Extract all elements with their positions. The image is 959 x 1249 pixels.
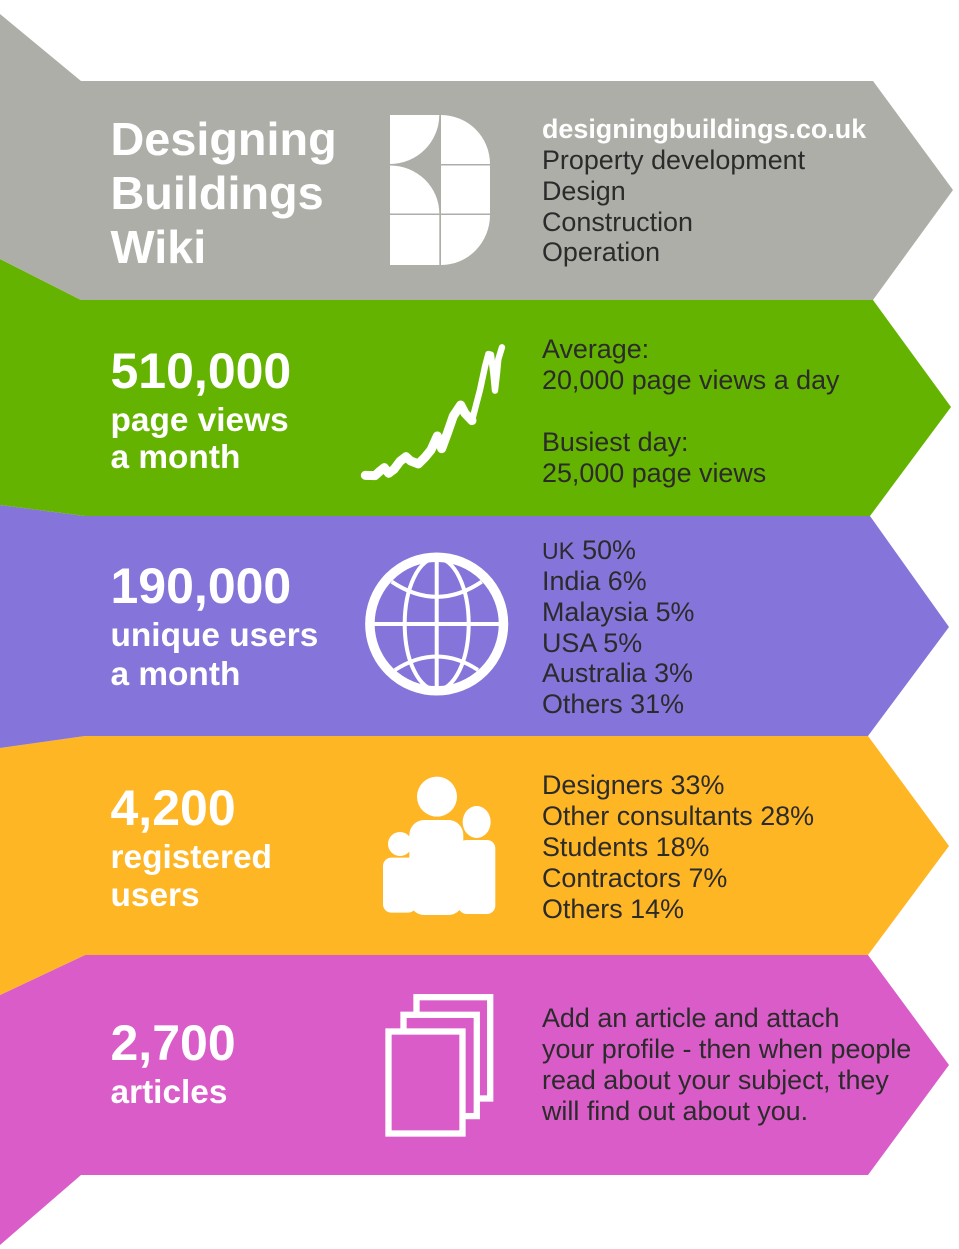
icon: stacked documents: [388, 997, 490, 1134]
text block: call to add an article: read about your subject, they: [542, 1065, 889, 1095]
text block: user types: Other consultants 28%: [542, 801, 814, 831]
heading: 190,000 unique users a month: 190,000: [110, 558, 291, 614]
panel: grey header arrow: [0, 14, 953, 300]
heading: 510,000 page views a month: a month: [110, 439, 240, 476]
panel: orange registered users arrow: [0, 736, 949, 995]
text block: user types: Designers 33%: [542, 770, 724, 800]
text block: page view averages: 25,000 page views: [542, 458, 766, 488]
text block: site description: Property development: [542, 145, 806, 175]
text block: user types: [542, 770, 814, 924]
panel: green page views arrow: [0, 259, 951, 516]
text block: user countries: Australia 3%: [542, 658, 693, 688]
text block: site description: [542, 114, 866, 267]
icon: globe: [370, 557, 504, 691]
text block: call to add an article: your profile - then when people: [542, 1034, 911, 1064]
text block: call to add an article: [541, 1003, 911, 1126]
panel: purple unique users arrow: [0, 505, 949, 748]
heading: 2,700 articles: [110, 1015, 236, 1111]
heading: 4,200 registered users: 4,200: [110, 780, 236, 836]
heading: 190,000 unique users a month: a month: [110, 656, 240, 693]
text block: site description: Operation: [542, 237, 660, 267]
text block: user types: Students 18%: [542, 832, 709, 862]
icon: group of people: [383, 777, 495, 915]
heading: 190,000 unique users a month: unique users: [110, 617, 318, 654]
text block: user countries: [542, 535, 694, 719]
heading: 4,200 registered users: [110, 780, 272, 914]
heading: Designing Buildings Wiki: Wiki: [110, 221, 206, 273]
text block: page view averages: Average:: [542, 334, 649, 364]
text block: user countries: UK 50%: [542, 535, 636, 565]
heading: 510,000 page views a month: page views: [110, 402, 289, 439]
text block: page view averages: 20,000 page views a day: [542, 365, 840, 395]
text block: call to add an article: will find out about you.: [541, 1096, 808, 1126]
text block: site description: Design: [542, 176, 626, 206]
text block: page view averages: [542, 334, 840, 488]
text block: page view averages: Busiest day:: [542, 427, 688, 457]
text block: user countries: Malaysia 5%: [542, 597, 694, 627]
heading: 190,000 unique users a month: [110, 558, 318, 693]
panel: magenta articles arrow: [0, 955, 949, 1245]
chart: rising page views line: [365, 347, 502, 476]
heading: 4,200 registered users: users: [110, 877, 200, 914]
heading: Designing Buildings Wiki: [110, 113, 337, 273]
text block: site description: designingbuildings.co.uk: [542, 114, 866, 144]
text block: user types: Others 14%: [542, 894, 684, 924]
text block: user countries: Others 31%: [542, 689, 684, 719]
text block: user countries: India 6%: [542, 566, 647, 596]
heading: 2,700 articles: articles: [110, 1074, 227, 1111]
text block: user countries: USA 5%: [542, 628, 642, 658]
icon: Designing Buildings logo: [390, 115, 490, 265]
text block: site description: Construction: [542, 207, 693, 237]
text block: user types: Contractors 7%: [542, 863, 727, 893]
heading: Designing Buildings Wiki: Designing: [110, 113, 337, 165]
heading: Designing Buildings Wiki: Buildings: [110, 167, 324, 219]
heading: 2,700 articles: 2,700: [110, 1015, 236, 1071]
heading: 4,200 registered users: registered: [110, 839, 272, 876]
heading: 510,000 page views a month: [110, 343, 291, 476]
text block: call to add an article: Add an article and attach: [542, 1003, 840, 1033]
heading: 510,000 page views a month: 510,000: [110, 343, 291, 399]
